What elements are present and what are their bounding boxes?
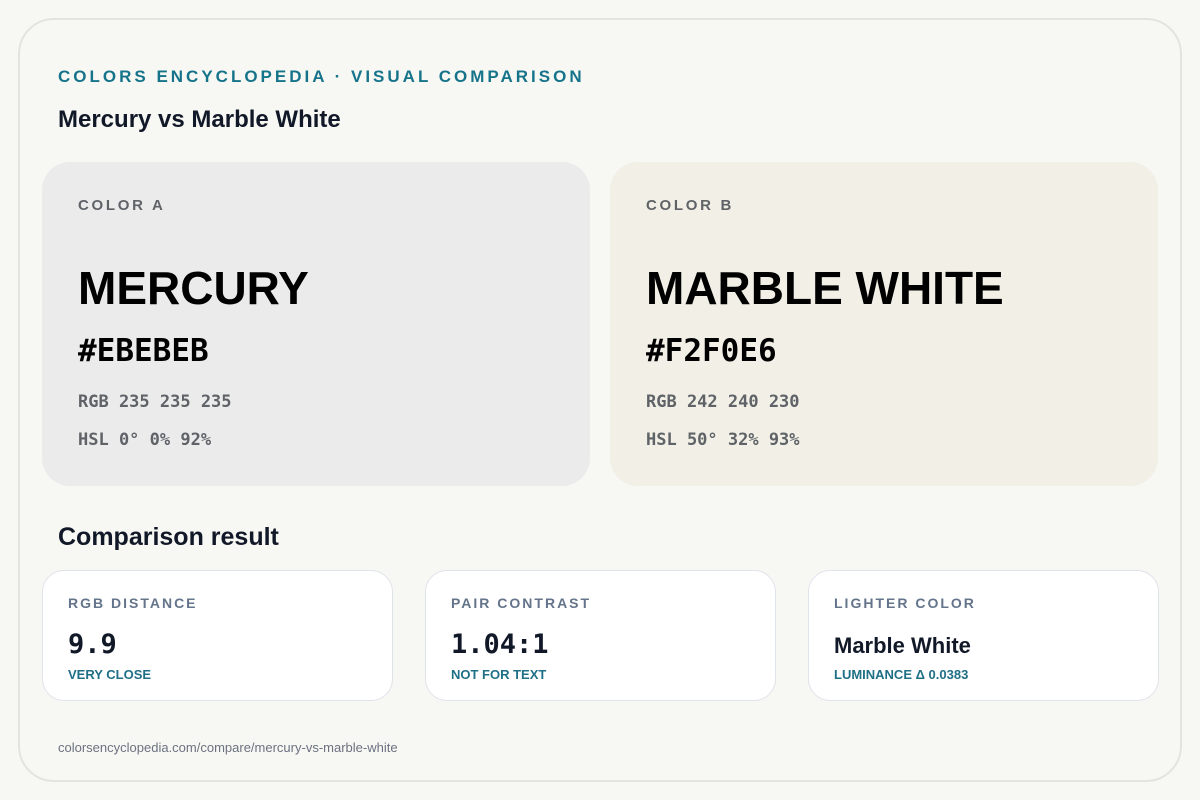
color A RGB values: RGB 235 235 235 bbox=[78, 392, 232, 412]
color A hex: #EBEBEB bbox=[78, 333, 209, 369]
title: Mercury vs Marble White bbox=[58, 106, 341, 133]
color B HSL values: HSL 50° 32% 93% bbox=[646, 430, 800, 450]
color A label: COLOR A bbox=[78, 197, 166, 214]
color B RGB values: RGB 242 240 230 bbox=[646, 392, 800, 412]
card: lighter color bbox=[808, 570, 1158, 701]
eyebrow heading: COLORS ENCYCLOPEDIA · VISUAL COMPARISON bbox=[58, 67, 585, 86]
color A HSL values: HSL 0° 0% 92% bbox=[78, 430, 211, 450]
luminance difference note: LUMINANCE Δ 0.0383 bbox=[834, 667, 968, 682]
section heading: comparison result: Comparison result bbox=[58, 523, 279, 551]
pair contrast note: NOT FOR TEXT bbox=[451, 667, 546, 682]
pair contrast label: PAIR CONTRAST bbox=[451, 595, 591, 611]
color B hex: #F2F0E6 bbox=[646, 333, 777, 369]
RGB distance label: RGB DISTANCE bbox=[68, 595, 198, 611]
color B name: MARBLE WHITE bbox=[646, 262, 1004, 314]
RGB distance note: VERY CLOSE bbox=[68, 667, 151, 682]
lighter color name: Marble White bbox=[834, 633, 971, 658]
panel: color A swatch bbox=[42, 162, 590, 486]
color B label: COLOR B bbox=[646, 197, 734, 214]
footer source URL: colorsencyclopedia.com/compare/mercury-vs-marble-white bbox=[58, 740, 398, 755]
color A name: MERCURY bbox=[78, 262, 309, 314]
pair contrast value: 1.04:1 bbox=[451, 629, 549, 660]
RGB distance value: 9.9 bbox=[68, 629, 117, 660]
card: RGB distance bbox=[42, 570, 392, 701]
card: pair contrast bbox=[424, 570, 776, 701]
lighter color label: LIGHTER COLOR bbox=[834, 595, 976, 611]
panel: color B swatch bbox=[610, 162, 1158, 486]
